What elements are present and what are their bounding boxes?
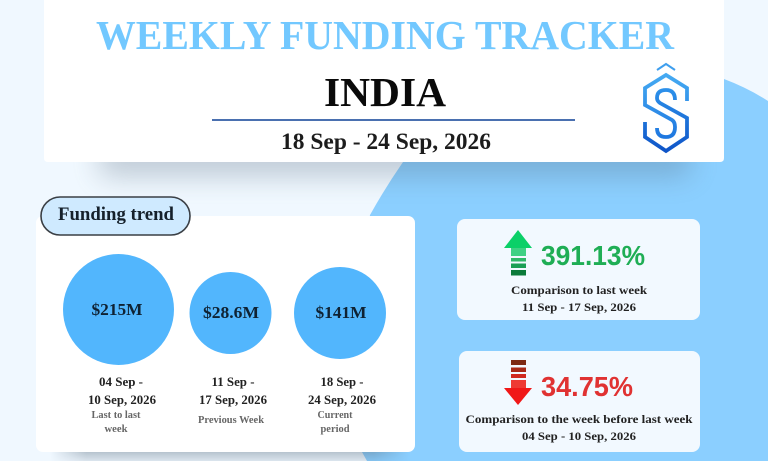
- bubble: 11 Sep week: Previous Week: [198, 415, 264, 426]
- shadow: funding panel: [50, 452, 410, 461]
- bubble: 11 Sep week: $28.6M: [203, 303, 259, 322]
- panel: header: [44, 0, 724, 162]
- bubble: 18 Sep week: [294, 267, 386, 435]
- bubble: 04 Sep week: $215M: [92, 300, 142, 319]
- icon: logo: [645, 64, 687, 151]
- icon: red down arrow: [504, 360, 532, 405]
- value: 391.13%: 391.13%: [541, 240, 645, 271]
- divider line: [212, 119, 575, 121]
- caption: Comparison to the week before last week: [466, 412, 693, 426]
- bubble: 18 Sep week: 24 Sep, 2026: [308, 393, 376, 407]
- bubble: 04 Sep week: 10 Sep, 2026: [88, 393, 156, 407]
- icon: green up arrow: [504, 230, 532, 276]
- panel: comparison to week before last: 04 Sep - 10 Sep, 2026: [522, 429, 636, 443]
- panel: comparison to week before last: [459, 351, 700, 452]
- bubble: 04 Sep week: week: [104, 424, 128, 435]
- bubble: 18 Sep week: $141M: [316, 303, 366, 322]
- bubble: 18 Sep week: 18 Sep -: [320, 375, 364, 389]
- badge: funding trend: Funding trend: [58, 205, 175, 225]
- heading: country: INDIA: [324, 69, 446, 115]
- bubble: 04 Sep week: [63, 254, 174, 435]
- background blue circle: [350, 79, 768, 461]
- bubble: 18 Sep week: period: [320, 424, 350, 435]
- panel: comparison to last week: 11 Sep - 17 Sep, 2026: [522, 300, 636, 314]
- bubble: 11 Sep week: 17 Sep, 2026: [199, 393, 267, 407]
- date range: 18 Sep - 24 Sep, 2026: [281, 129, 491, 154]
- bubble: 11 Sep week: [190, 272, 272, 426]
- bubble: 04 Sep week: Last to last: [92, 410, 141, 421]
- title: WEEKLY FUNDING TRACKER: [96, 12, 674, 58]
- panel: comparison to last week: [457, 219, 700, 320]
- caption: Comparison to last week: [511, 283, 647, 297]
- badge: funding trend: [41, 197, 190, 235]
- shadow: header: [100, 140, 690, 176]
- bubble: 11 Sep week: 11 Sep -: [212, 375, 254, 389]
- value: 34.75%: 34.75%: [541, 371, 633, 402]
- panel: funding trend: [36, 197, 415, 452]
- bubble: 04 Sep week: 04 Sep -: [99, 375, 143, 389]
- bubble: 18 Sep week: Current: [318, 410, 353, 421]
